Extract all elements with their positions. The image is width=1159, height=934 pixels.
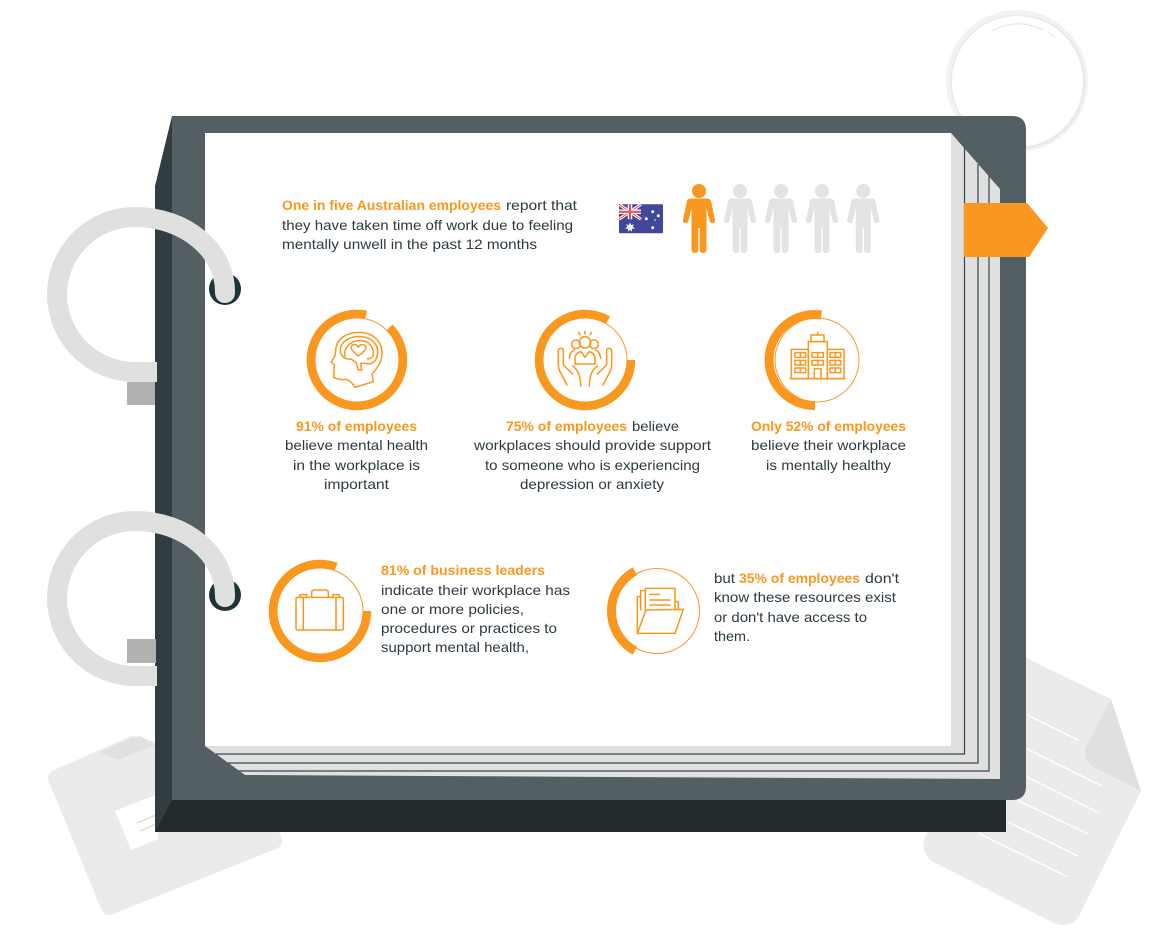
- text: 75% of employees: believe: [632, 418, 679, 434]
- text: 81% of business leaders: [381, 562, 570, 655]
- text: only 52% of employees: [751, 418, 906, 473]
- background document bottom right: [923, 655, 1141, 925]
- text: 91% of employees: believe mental health: [285, 437, 428, 453]
- lower binder ring: [57, 521, 241, 676]
- text: only 52% of employees: believe their workplace: [751, 437, 906, 453]
- text: 91% of employees: important: [324, 476, 389, 492]
- text: 81% of business leaders: one or more policies,: [381, 601, 524, 617]
- text: 35% of employees: them.: [714, 628, 750, 644]
- icon: folder with documents: [637, 588, 683, 633]
- icon: office building: [790, 332, 845, 379]
- pictogram: one in five people: [683, 184, 879, 253]
- intro statement: One in five Australian employees: [282, 197, 501, 213]
- orange bookmark tab: [964, 203, 1048, 257]
- upper binder ring: [57, 217, 241, 405]
- icon: hands holding people: [558, 331, 612, 386]
- text: 91% of employees: in the workplace is: [293, 457, 420, 473]
- intro statement: they have taken time off work due to feeling: [282, 217, 573, 233]
- icon: Australian flag: [619, 204, 663, 233]
- background document bottom left: [56, 736, 274, 907]
- text: 35% of employees: don't: [865, 570, 899, 586]
- notebook cover: [155, 116, 1026, 832]
- text: 75% of employees: 75% of employees: [506, 418, 627, 434]
- text: 81% of business leaders: indicate their workplace has: [381, 582, 570, 598]
- text: only 52% of employees: Only 52% of employees: [751, 418, 906, 434]
- donut: 91% with brain icon: [311, 314, 403, 406]
- donut: 52% with building icon: [769, 315, 859, 406]
- icon: grey person 1: [724, 184, 756, 253]
- donut: 35% with folder icon: [611, 568, 700, 654]
- text: 91% of employees: 91% of employees: [296, 418, 417, 434]
- text: only 52% of employees: is mentally healthy: [766, 457, 891, 473]
- text: 75% of employees: workplaces should provide support: [473, 437, 711, 453]
- icon: grey person 2: [765, 184, 797, 253]
- notebook pages: [205, 133, 1000, 779]
- text: 75% of employees: to someone who is experiencing: [485, 457, 700, 473]
- text: 75% of employees: [473, 418, 711, 492]
- intro statement: [282, 197, 577, 252]
- text: 35% of employees: 35% of employees: [739, 570, 860, 586]
- icon: highlighted person: [683, 184, 715, 253]
- decorative magnifier ring top right: [946, 10, 1088, 152]
- donut: 81% with briefcase icon: [273, 564, 367, 658]
- icon: brain: [331, 332, 382, 387]
- text: 35% of employees: or don't have access to: [714, 609, 867, 625]
- donut: 75% with hands and people icon: [539, 314, 631, 406]
- text: 81% of business leaders: support mental health,: [381, 639, 529, 655]
- icon: briefcase: [296, 590, 343, 630]
- text: 35% of employees: [714, 570, 899, 644]
- intro statement: report that: [506, 197, 577, 213]
- text: 35% of employees: know these resources exist: [714, 589, 896, 605]
- text: 81% of business leaders: procedures or practices to: [381, 620, 557, 636]
- icon: grey person 4: [847, 184, 879, 253]
- icon: grey person 3: [806, 184, 838, 253]
- text: 75% of employees: depression or anxiety: [520, 476, 664, 492]
- text: 81% of business leaders: 81% of business leaders: [381, 562, 545, 578]
- intro statement: mentally unwell in the past 12 months: [282, 236, 537, 252]
- text: 35% of employees: but: [714, 570, 735, 586]
- text: 91% of employees: [285, 418, 428, 492]
